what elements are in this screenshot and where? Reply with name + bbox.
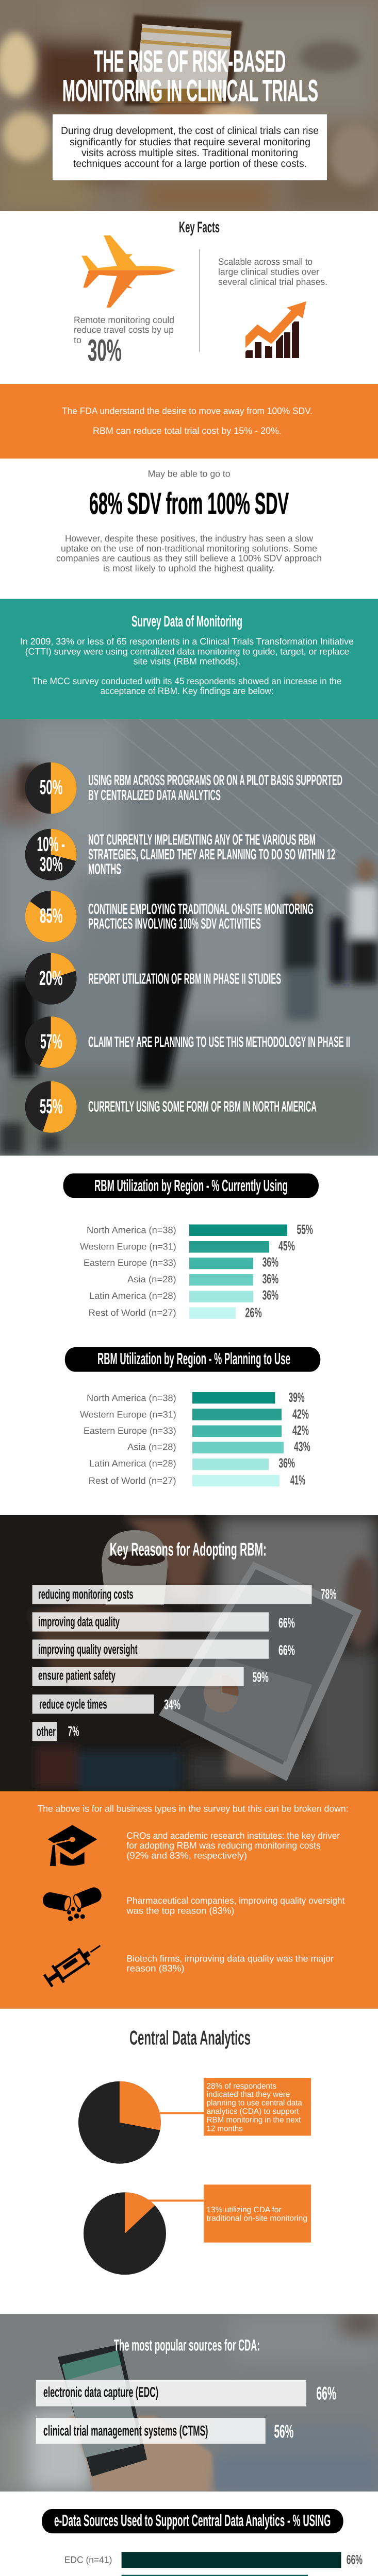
text: biotech [126, 1954, 334, 1974]
survey text [20, 636, 354, 696]
callout: 28%: analytics (CDA) to support [207, 2107, 299, 2116]
text: CROs: CROs and academic research institutes: the key driver [126, 1831, 340, 1841]
heading: central data analytics: Central Data Analytics [129, 2027, 251, 2049]
text: CROs: (92% and 83%, respectively) [126, 1850, 247, 1860]
text: travel cost saving: reduce travel costs by up [74, 325, 174, 335]
bar values: 42% [292, 1406, 309, 1421]
bar values: 26% [245, 1304, 262, 1320]
bar: EDC [36, 2380, 336, 2406]
finding: 50% [25, 762, 342, 814]
bar values: 45% [278, 1238, 295, 1253]
callout: 28%: 28% of respondents [207, 2082, 276, 2091]
callout: 28%: indicated that they were [207, 2090, 290, 2099]
callout: 13% [204, 2184, 311, 2243]
text: travel cost saving: Remote monitoring could [74, 315, 174, 325]
finding: 10% - 30% [25, 829, 335, 880]
bar: improving quality oversight: 66% [278, 1642, 295, 1658]
bar: ensure patient safety [32, 1667, 269, 1686]
bar values [245, 1222, 313, 1320]
finding: 10% - 30%: 30% [40, 853, 63, 876]
bar labels: Latin America (n=28) [89, 1291, 176, 1301]
bar labels: Eastern Europe (n=33) [84, 1426, 176, 1436]
survey text: In 2009, 33% or less of 65 respondents in a Clinical Trials Transformation Initiative [20, 636, 354, 647]
panel: key facts [74, 219, 327, 368]
callout: 28%: planning to use central data [207, 2099, 302, 2107]
finding: 10% - 30%: MONTHS [88, 861, 121, 878]
panel: central data analytics [78, 2027, 311, 2275]
bar: ensure patient safety: ensure patient safety [38, 1667, 116, 1683]
finding: 85%: 85% [40, 905, 63, 927]
bar labels: Western Europe (n=31) [80, 1242, 176, 1252]
bar: EDC: electronic data capture (EDC) [43, 2384, 158, 2400]
panel: hero [0, 0, 378, 211]
text: pharmaceutical [126, 1895, 344, 1916]
bar values: 43% [294, 1438, 310, 1454]
panel: key findings [0, 719, 378, 1156]
text: CROs [126, 1831, 340, 1860]
icon: airplane [81, 235, 175, 308]
text: biotech: reason (83%) [126, 1963, 185, 1974]
bar: reduce cycle times: 34% [164, 1697, 180, 1713]
panel: SDV statement [56, 469, 322, 573]
intro text box [53, 114, 327, 180]
intro text box: visits across multiple sites. Traditional monitoring [81, 147, 298, 159]
bar: improving data quality: improving data quality [38, 1614, 120, 1630]
bar labels: Eastern Europe (n=33) [84, 1258, 176, 1268]
bar values: 36% [262, 1271, 278, 1286]
hero photo: tablet in hands [0, 0, 378, 211]
paragraph: is most likely to uphold the highest quality. [103, 563, 275, 573]
heading: popular sources: The most popular sources for CDA: [114, 2336, 260, 2354]
bar labels: Asia (n=28) [127, 1442, 176, 1452]
chart heading pill [63, 1174, 319, 1198]
panel: FDA orange band [0, 384, 378, 459]
breakdown intro: The above is for all business types in the survey but this can be broken down: [37, 1803, 349, 1814]
chart heading pill [42, 2509, 343, 2533]
panel: business type breakdown [0, 1791, 378, 2009]
icon: rising chart arrow [241, 301, 306, 358]
bar values: 36% [278, 1455, 295, 1471]
bar values [170, 2552, 363, 2576]
panel: FDA orange band: The FDA understand the desire to move away from 100% SDV. [62, 405, 313, 416]
bar labels: Rest of World (n=27) [89, 1476, 176, 1486]
bar: other [32, 1722, 79, 1741]
finding: 55%: 55% [40, 1095, 63, 1118]
bar: reduce cycle times [32, 1694, 180, 1714]
panel: FDA orange band: RBM can reduce total trial cost by 15% - 20%. [93, 426, 282, 436]
bar values: 42% [292, 1422, 309, 1438]
bar: improving data quality [32, 1612, 295, 1632]
text: pharmaceutical: Pharmaceutical companies, improving quality oversight [126, 1895, 344, 1906]
bar: reducing monitoring costs: 78% [321, 1586, 337, 1602]
heading: survey data: Survey Data of Monitoring [132, 613, 242, 630]
bar labels: Asia (n=28) [127, 1274, 176, 1284]
finding: 85% [25, 891, 314, 942]
bar values [278, 1389, 310, 1488]
bar labels: North America (n=38) [87, 1393, 176, 1403]
bar values: 39% [289, 1389, 305, 1405]
title [62, 44, 318, 108]
text: scalable: several clinical trial phases. [218, 277, 327, 287]
paragraph: uptake on the use of non-traditional monitoring solutions. Some [61, 543, 317, 553]
text: scalable [218, 257, 327, 287]
panel: key reasons for adopting RBM [0, 1515, 378, 1791]
photo: office corridor [0, 719, 378, 1156]
panel: survey data [0, 599, 378, 719]
bar labels: Latin America (n=28) [89, 1459, 176, 1469]
text: travel cost saving [74, 315, 174, 368]
bar values: 36% [262, 1287, 278, 1302]
bar values: 55% [297, 1222, 313, 1237]
bar: CTMS: clinical trial management systems (CTMS) [43, 2422, 208, 2438]
finding: 10% - 30%: 10% - [37, 833, 65, 856]
text: biotech: Biotech firms, improving data quality was the major [126, 1954, 334, 1964]
bar: improving data quality: 66% [278, 1615, 295, 1631]
bar: improving quality oversight [32, 1639, 295, 1659]
bar labels: Rest of World (n=27) [89, 1308, 176, 1318]
bar values: 66% [347, 2552, 363, 2567]
heading: key facts: Key Facts [179, 219, 220, 236]
survey text: site visits (RBM methods). [133, 656, 240, 667]
lead-in text: May be able to go to [148, 469, 231, 479]
bar: reducing monitoring costs: reducing monitoring costs [38, 1586, 133, 1602]
survey text: The MCC survey conducted with its 45 respondents showed an increase in the [32, 676, 341, 686]
chart: RBM utilization currently using [63, 1174, 319, 1320]
finding: 20%: 20% [39, 967, 63, 990]
bar: reducing monitoring costs [32, 1585, 337, 1604]
bar: CTMS [36, 2418, 293, 2444]
finding: 20% [25, 953, 281, 1005]
paragraph: companies are cautious as they still believe a 100% SDV approach [56, 553, 322, 563]
pie chart: 28% [78, 2081, 161, 2164]
bar labels [80, 1225, 176, 1318]
text: travel cost saving: 30% [88, 333, 122, 368]
icon: graduation cap [48, 1825, 97, 1866]
callout: 28% [204, 2078, 311, 2136]
bars [189, 1225, 287, 1319]
bar: other: 7% [68, 1723, 79, 1739]
text: CROs: for adopting RBM was reducing monitoring costs [126, 1840, 321, 1851]
bar values: 41% [290, 1472, 305, 1488]
bar labels: North America (n=38) [87, 1225, 176, 1235]
pie chart: 13% [84, 2192, 166, 2275]
bar values: 36% [262, 1255, 278, 1270]
bars [122, 2552, 341, 2576]
connector line [160, 2112, 204, 2114]
bar labels: EDC (n=41) [64, 2554, 112, 2565]
bars [192, 1392, 284, 1486]
photo: coffee and tablet [0, 1515, 378, 1791]
bar labels [80, 1393, 176, 1486]
survey text: acceptance of RBM. Key findings are below: [100, 686, 273, 696]
chart: e-data sources percent using [15, 2509, 363, 2576]
photo: hand holding phone [0, 2314, 378, 2492]
callout: 13%: 13% utilizing CDA for [207, 2206, 282, 2214]
bar labels: Western Europe (n=31) [80, 1409, 176, 1419]
callout: 28%: 12 months [207, 2124, 243, 2133]
text: scalable: Scalable across small to [218, 257, 313, 267]
text: travel cost saving: to [74, 335, 81, 345]
intro text box: During drug development, the cost of clinical trials can rise [61, 125, 319, 137]
bar: ensure patient safety: 59% [253, 1669, 269, 1685]
bar: improving quality oversight: improving quality oversight [38, 1641, 138, 1657]
finding: 57%: 57% [40, 1030, 62, 1053]
finding: 50%: BY CENTRALIZED DATA ANALYTICS [88, 787, 221, 804]
text: pharmaceutical: was the top reason (83%) [126, 1905, 234, 1916]
finding: 55% [25, 1081, 317, 1133]
finding: 50%: 50% [40, 776, 63, 799]
icon: syringe [41, 1937, 106, 1990]
bar: reduce cycle times: reduce cycle times [39, 1696, 107, 1711]
connector line [149, 2199, 204, 2201]
paragraph [56, 533, 322, 573]
callout: 13%: traditional on-site monitoring [207, 2214, 307, 2223]
chart heading pill [65, 1347, 320, 1372]
chart: RBM utilization planning to use [65, 1347, 320, 1488]
callout: 28%: RBM monitoring in the next [207, 2116, 301, 2125]
intro text box: significantly for studies that require several monitoring [70, 137, 310, 148]
divider line [199, 249, 200, 352]
bar: other: other [37, 1723, 56, 1739]
icon: capsule [41, 1885, 104, 1921]
finding: 57% [25, 1016, 350, 1068]
text: scalable: large clinical studies over [218, 267, 319, 277]
bar: EDC: 66% [316, 2382, 336, 2403]
bar: CTMS: 56% [274, 2421, 293, 2442]
paragraph: However, despite these positives, the industry has seen a slow [65, 533, 314, 544]
panel: most popular sources for CDA [0, 2314, 378, 2492]
intro text box: techniques account for a large portion of these costs. [73, 158, 307, 170]
survey text: (CTTI) survey were using centralized data monitoring to guide, target, or replace [25, 647, 349, 657]
